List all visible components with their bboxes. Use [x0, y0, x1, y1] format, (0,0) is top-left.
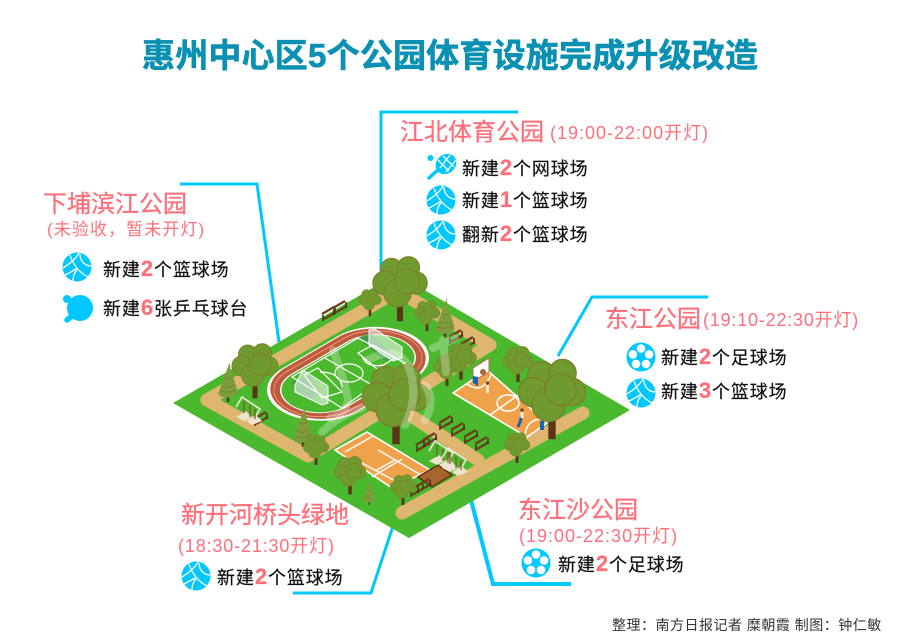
running track	[267, 327, 429, 421]
lawn	[173, 274, 630, 538]
football goals	[295, 329, 402, 405]
row: 新建2个足球场: 新建2个足球场	[661, 344, 788, 369]
row: 新建6张乒乓球台: 新建6张乒乓球台	[103, 295, 248, 320]
heading: 下埔滨江公园	[43, 191, 187, 218]
trees	[232, 257, 586, 505]
basketball court	[453, 370, 547, 437]
heading: 东江公园	[605, 306, 701, 333]
icon: table tennis paddle	[63, 295, 93, 321]
park illustration	[173, 257, 630, 538]
row: 新建2个网球场: 新建2个网球场	[462, 155, 589, 180]
row: 新建2个篮球场: 新建2个篮球场	[217, 564, 344, 589]
connector line: 下埔滨江公园	[180, 184, 279, 342]
icon: basketball	[62, 252, 92, 282]
status note: (未验收，暂未开灯)	[47, 220, 205, 239]
panel: 新开河桥头绿地	[178, 502, 349, 590]
opening hours: (18:30-21:30开灯)	[178, 536, 335, 556]
benches	[254, 301, 489, 497]
row: 翻新2个篮球场: 翻新2个篮球场	[462, 221, 589, 246]
icon: basketball	[426, 220, 456, 250]
panel: 下埔滨江公园	[43, 191, 248, 321]
connector line: 东江公园	[558, 297, 708, 356]
row: 新建1个篮球场: 新建1个篮球场	[462, 187, 589, 212]
basketball hoop and players	[473, 358, 544, 430]
title: 惠州中心区5个公园体育设施完成升级改造	[142, 37, 758, 74]
credit line: 整理：南方日报记者 糜朝霞 制图：钟仁敏	[612, 617, 882, 633]
heading: 新开河桥头绿地	[181, 502, 349, 529]
opening hours: (19:10-22:30开灯)	[703, 310, 859, 330]
row: 新建3个篮球场: 新建3个篮球场	[661, 378, 788, 403]
icon: football	[522, 548, 550, 578]
icon: football	[626, 342, 656, 372]
panel: 东江沙公园	[518, 497, 685, 578]
row: 新建2个篮球场: 新建2个篮球场	[103, 256, 230, 281]
connector line: 东江沙公园	[471, 500, 571, 584]
heading: 江北体育公园	[400, 119, 544, 146]
conifers	[218, 298, 455, 505]
panel: 江北体育公园	[400, 119, 709, 250]
watermark	[322, 338, 455, 432]
opening hours: (19:00-22:00开灯)	[550, 123, 709, 143]
walkways	[207, 297, 583, 513]
sandbox	[418, 465, 452, 487]
icon: basketball	[426, 186, 456, 214]
row: 新建2个足球场: 新建2个足球场	[558, 551, 685, 576]
connector line: 江北体育公园	[381, 112, 518, 278]
connector line: 新开河桥头绿地	[293, 526, 393, 593]
football pitch	[290, 332, 405, 408]
panel: 东江公园	[605, 306, 859, 408]
opening hours: (19:00-22:30开灯)	[519, 526, 678, 546]
heading: 东江沙公园	[518, 497, 638, 524]
playground swings	[236, 397, 468, 476]
icon: basketball	[626, 378, 656, 408]
icon: basketball	[182, 562, 210, 590]
tennis court	[335, 432, 430, 490]
icon: tennis racket	[428, 150, 461, 178]
